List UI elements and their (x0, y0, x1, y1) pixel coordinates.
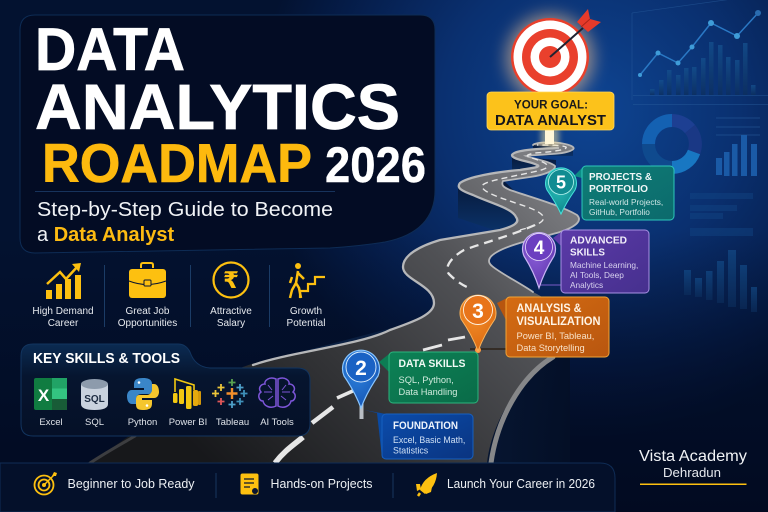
benefit: great job opportunities: Great Job (126, 306, 170, 317)
stage 4 card: advanced skills (539, 230, 649, 293)
benefit: growth potential: Potential (287, 318, 325, 329)
item: hands-on projects: Hands-on Projects (270, 476, 372, 491)
stage 4 card: advanced skills: ADVANCED (570, 234, 627, 246)
road edge lines (90, 142, 579, 463)
stage 2 card: data skills: DATA SKILLS (398, 358, 466, 370)
tool: SQL: SQL (84, 394, 105, 405)
goal post glow (541, 128, 559, 146)
faint table (690, 193, 753, 236)
tool: Excel: X (38, 386, 50, 405)
stage 2 pin: 2 (355, 357, 367, 380)
goal sign: DATA ANALYST (495, 112, 606, 129)
item: launch your career in 2026 (416, 473, 595, 496)
stage 5 card: projects and portfolio: PROJECTS & (589, 171, 652, 183)
benefit: attractive salary (210, 262, 252, 329)
road centre dashes (275, 145, 566, 463)
stage 3 card: analysis and visualization (470, 297, 609, 357)
stage 3 card: analysis and visualization: ANALYSIS & (516, 303, 582, 315)
benefit: high demand career (32, 263, 94, 329)
stage 5 pin: 5 (556, 172, 566, 192)
tool: Power BI: Power BI (169, 417, 207, 428)
item: beginner to job ready: Beginner to Job Ready (68, 476, 195, 491)
title line: ANALYTICS: ANALYTICS (35, 71, 400, 143)
goal sign: YOUR GOAL: (514, 98, 588, 112)
tool: Tableau: Tableau (216, 417, 249, 428)
stage 5 card: projects and portfolio: Real-world Projects, (589, 197, 663, 207)
tool: AI Tools (259, 378, 295, 428)
background dashboard charts (632, 0, 768, 312)
tool: AI Tools: AI Tools (260, 417, 294, 428)
goal target (506, 9, 601, 102)
donut chart (648, 120, 695, 168)
tool: Tableau (212, 379, 249, 428)
stage 3 card: analysis and visualization: VISUALIZATION (516, 316, 600, 328)
stage 1 card: foundation: Excel, Basic Math, (393, 435, 465, 445)
title line: ROADMAP: ROADMAP (42, 132, 312, 194)
panel: key skills and tools (21, 344, 310, 436)
benefit: attractive salary: Salary (217, 318, 245, 329)
arrow in target (550, 9, 601, 57)
brand: Vista Academy: Dehradun (663, 466, 721, 480)
tool: Power BI (169, 379, 207, 428)
stage 5 card: projects and portfolio: GitHub, Portfolio (589, 207, 650, 217)
item: beginner to job ready (34, 472, 195, 494)
title line: 2026: 2026 (325, 137, 426, 193)
faint lower right bars (684, 250, 757, 312)
stage 1 card: foundation: Statistics (393, 446, 429, 456)
benefit: great job opportunities (118, 263, 177, 329)
winding road (90, 142, 579, 463)
brand: Vista Academy: Vista Academy (639, 448, 747, 465)
stage 2 card: data skills: Data Handling (398, 387, 457, 397)
benefit: growth potential: Growth (290, 306, 322, 317)
stage 5 card: projects and portfolio (574, 166, 674, 220)
stage 2 card: data skills (379, 352, 478, 403)
brand: Vista Academy (639, 448, 747, 485)
road surface (90, 142, 579, 463)
stage 1 card: foundation: FOUNDATION (393, 420, 458, 432)
stage 5 pin (546, 168, 576, 214)
panel heading: KEY SKILLS & TOOLS (33, 351, 180, 367)
tool: Python (127, 378, 159, 428)
subtitle: Step-by-Step Guide to Become (37, 199, 333, 221)
tool: SQL: SQL (85, 417, 104, 428)
benefits row (32, 262, 325, 329)
benefit: attractive salary: ₹ (223, 268, 239, 294)
tool: Excel (34, 378, 67, 428)
benefit: growth potential (287, 263, 325, 329)
stage 4 card: advanced skills: SKILLS (570, 246, 605, 258)
item: hands-on projects (240, 474, 372, 494)
stage 3 pin (460, 295, 496, 353)
stage 1 card: foundation (364, 410, 473, 459)
item: launch your career in 2026: Launch Your Career in 2026 (447, 477, 595, 491)
stage 3 card: analysis and visualization: Power BI, Tableau, (516, 331, 594, 341)
small bar chart (716, 118, 760, 176)
benefit: great job opportunities: Opportunities (118, 318, 177, 329)
stage 4 pin (522, 233, 556, 288)
stage 4 card: advanced skills: Machine Learning, (570, 260, 638, 270)
benefit: high demand career: Career (48, 318, 79, 329)
tool: Excel: Excel (39, 417, 63, 428)
stage 3 pin: 3 (472, 300, 484, 323)
line and bar chart (632, 0, 768, 104)
title line: DATA: DATA (35, 16, 185, 83)
stage 4 pin: 4 (534, 238, 545, 259)
subtitle: a Data Analyst (37, 224, 174, 246)
stage 4 card: advanced skills: AI Tools, Deep (570, 270, 624, 280)
tool: Python: Python (128, 417, 157, 428)
tool: SQL (81, 379, 108, 428)
goal sign (487, 92, 614, 130)
stage 3 card: analysis and visualization: Data Storytelling (516, 343, 585, 353)
road plinth sides (120, 145, 573, 470)
stage 2 card: data skills: SQL, Python, (398, 375, 454, 385)
benefit: attractive salary: Attractive (210, 306, 252, 317)
stage 4 card: advanced skills: Analytics (570, 280, 603, 290)
stage 2 pin (342, 350, 380, 419)
bottom bar (0, 463, 615, 512)
stage 5 card: projects and portfolio: PORTFOLIO (589, 183, 648, 195)
title panel (20, 15, 435, 253)
benefit: high demand career: High Demand (32, 306, 94, 317)
subtitle (37, 199, 333, 246)
